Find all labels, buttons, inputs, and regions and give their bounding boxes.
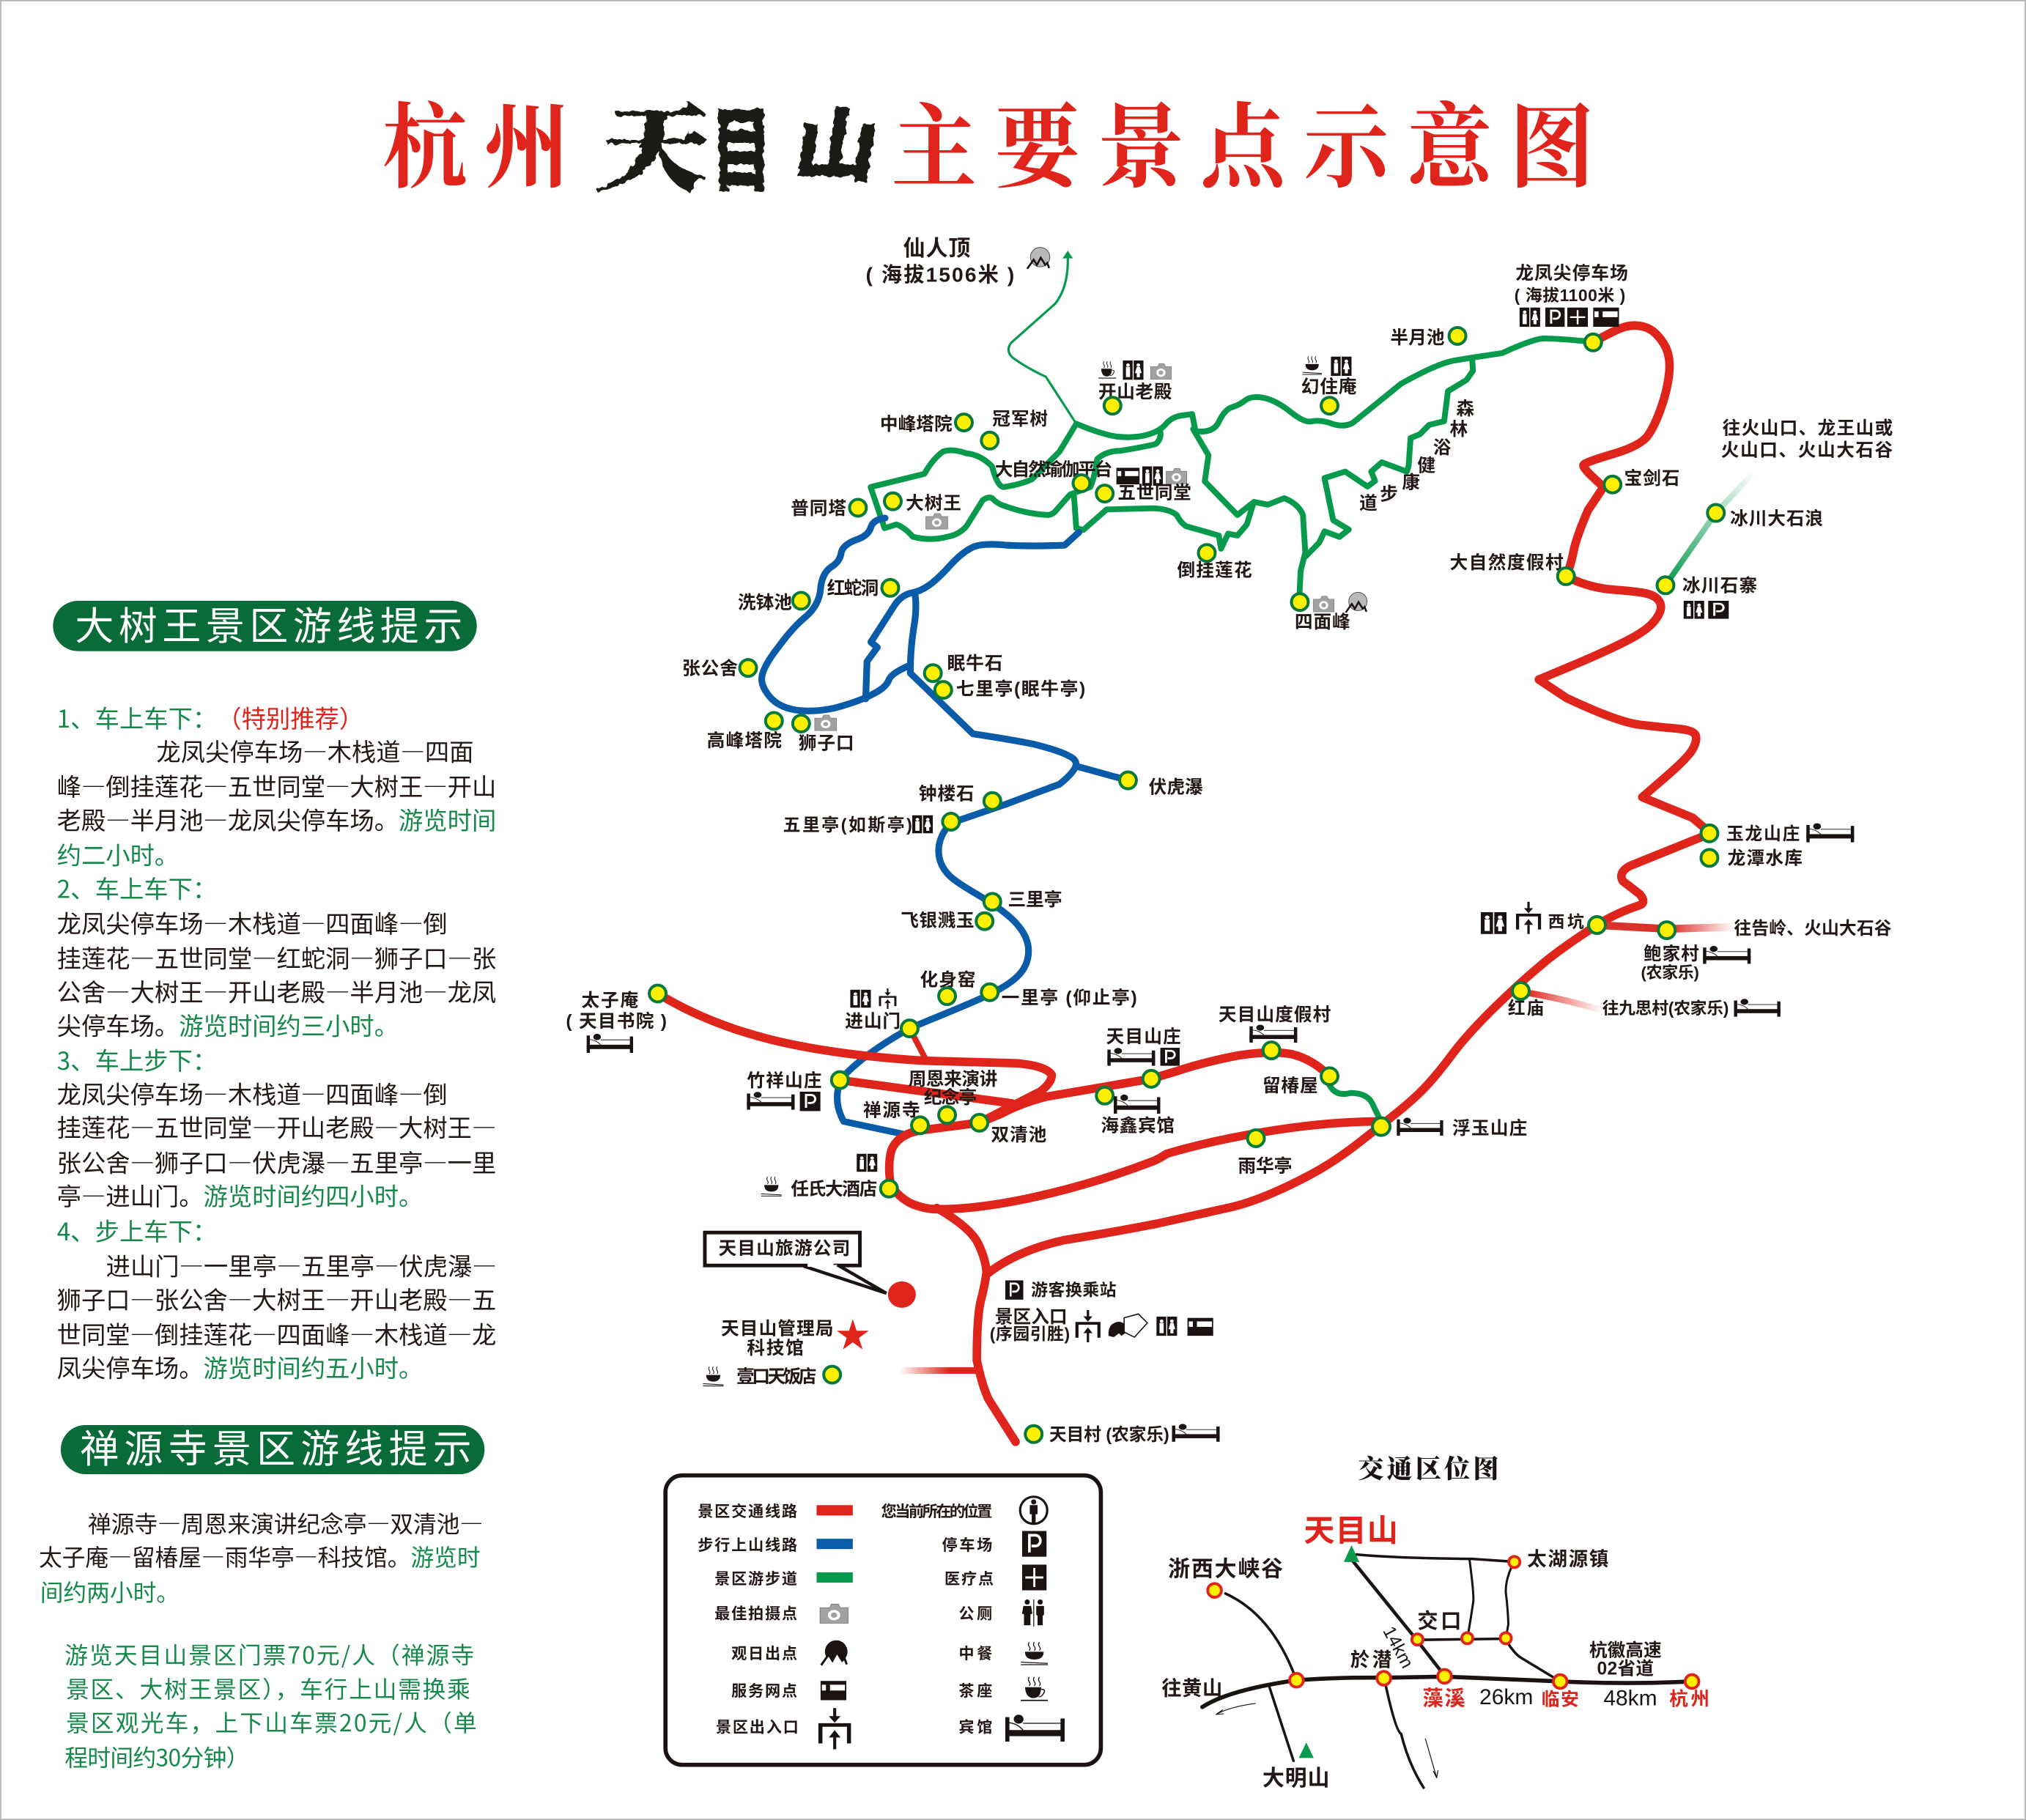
map: scenic south locations bbox=[703, 1005, 1527, 1445]
route tip 1: 车上车下： bbox=[95, 699, 217, 735]
map: north-west locations bbox=[566, 237, 1628, 1053]
place labels: 02省道 bbox=[1597, 1658, 1654, 1679]
location: 三里亭: 三里亭 bbox=[1008, 889, 1062, 910]
location: 壹口天饭店 bbox=[703, 1366, 840, 1387]
route tip 1: 龙凤尖停车场—木栈道—四面 bbox=[156, 733, 473, 769]
legend: right icons: 中餐 bbox=[958, 1645, 992, 1662]
location: 中峰塔院: 中峰塔院 bbox=[880, 414, 953, 434]
location: 往火山口、龙王山或火山大石谷: 往火山口、龙王山或 bbox=[1723, 418, 1893, 438]
location: 往告岭、火山大石谷: 往告岭、火山大石谷 bbox=[1734, 919, 1892, 939]
location: 七里亭: 七里亭(眠牛亭) bbox=[956, 678, 1085, 700]
place labels: 杭徽高速 bbox=[1589, 1640, 1662, 1661]
route tip text: 间约两小时。 bbox=[40, 1575, 180, 1608]
location: 任氏大酒店 bbox=[761, 1154, 898, 1199]
location: 倒挂莲花 bbox=[1177, 544, 1252, 580]
title: 天 bbox=[592, 73, 719, 210]
place labels: 48km bbox=[1603, 1687, 1657, 1711]
route tip 3: 亭—进山门。游览时间约四小时。 bbox=[57, 1177, 423, 1213]
location: 冠军树 bbox=[981, 409, 1048, 449]
location: 半月池: 半月池 bbox=[1390, 328, 1444, 348]
location: 五里亭: 五里亭(如斯亭) bbox=[783, 815, 912, 835]
traffic routes (red) bbox=[658, 325, 1734, 1442]
location: 玉龙山庄 bbox=[1701, 824, 1854, 844]
location: 一里亭: 一里亭 (仰止亭) bbox=[1002, 987, 1137, 1008]
place labels: 藻溪 bbox=[1422, 1687, 1465, 1710]
location: 飞银溅玉: 飞银溅玉 bbox=[901, 910, 975, 931]
location: 海鑫宾馆 bbox=[1096, 1087, 1175, 1136]
location: 海鑫宾馆: 海鑫宾馆 bbox=[1101, 1116, 1175, 1136]
location: 天目山管理局科技馆 bbox=[721, 1319, 869, 1358]
place labels: 26km bbox=[1479, 1685, 1533, 1709]
location: 天目村: 天目村 (农家乐) bbox=[1049, 1425, 1169, 1445]
legend: right icons: 茶座 bbox=[958, 1682, 992, 1700]
location: 玉龙山庄: 玉龙山庄 bbox=[1726, 824, 1800, 844]
location: 红蛇洞 bbox=[827, 577, 898, 599]
legend: right icons bbox=[881, 1497, 1065, 1742]
location: 五世同堂 bbox=[1096, 467, 1191, 503]
location: 往火山口、龙王山或火山大石谷 bbox=[1721, 418, 1893, 460]
location: 禅源寺: 禅源寺 bbox=[863, 1100, 920, 1121]
location: 太子庵 bbox=[566, 985, 667, 1053]
location: 仙人顶 bbox=[865, 237, 1050, 286]
road network bbox=[1202, 1555, 1692, 1788]
location: 眠牛石: 眠牛石 bbox=[947, 653, 1002, 673]
location: 狮子口 bbox=[793, 715, 854, 754]
location: 浮玉山庄: 浮玉山庄 bbox=[1452, 1118, 1527, 1139]
place labels: 浙西大峡谷 bbox=[1168, 1557, 1283, 1581]
legend: route lines bbox=[698, 1502, 853, 1588]
location: 钟楼石: 钟楼石 bbox=[919, 783, 975, 804]
legend: route lines: 步行上山线路 bbox=[698, 1536, 797, 1554]
location: 冰川石寨: 冰川石寨 bbox=[1682, 576, 1757, 596]
route tip 1: 约二小时。 bbox=[57, 836, 179, 872]
location: 天目山度假村 bbox=[1219, 1005, 1331, 1059]
legend: right icons: 公厕 bbox=[958, 1605, 992, 1622]
title: 目 bbox=[711, 76, 772, 210]
route tip 2: 车上车下： bbox=[95, 870, 217, 906]
location: 天目山庄 bbox=[1106, 1026, 1181, 1087]
location: 化身窑 bbox=[920, 969, 975, 1005]
location: 宝剑石: 宝剑石 bbox=[1624, 468, 1679, 489]
location: 景区入口: 景区入口 bbox=[995, 1308, 1068, 1328]
location: 留椿屋: 留椿屋 bbox=[1262, 1076, 1318, 1096]
location: 红庙: 红庙 bbox=[1508, 999, 1544, 1018]
location: 五世同堂: 五世同堂 bbox=[1117, 483, 1191, 503]
location: 龙凤尖停车场: 龙凤尖停车场 bbox=[1515, 263, 1628, 284]
location: 双清池 bbox=[971, 1114, 1046, 1145]
location: 化身窑: 化身窑 bbox=[920, 969, 975, 990]
route tip 3: 张公舍—狮子口—伏虎瀑—五里亭—一里 bbox=[57, 1143, 496, 1179]
map routes bbox=[658, 251, 1755, 1442]
place labels: 交口 bbox=[1417, 1609, 1461, 1632]
label: 森林浴健康步道: 森 bbox=[1456, 399, 1474, 419]
place labels: 於潜 bbox=[1350, 1649, 1392, 1671]
location: 景区入口 bbox=[990, 1308, 1213, 1344]
route tip 3: 龙凤尖停车场—木栈道—四面峰—倒 bbox=[57, 1075, 448, 1111]
ticket information: 景区观光车，上下山车票20元/人（单 bbox=[66, 1705, 477, 1739]
route tip 3 bbox=[57, 1041, 496, 1213]
location: 大树王 bbox=[884, 493, 961, 529]
legend: route lines: 景区交通线路 bbox=[698, 1502, 797, 1520]
location: 高峰塔院 bbox=[707, 712, 783, 751]
route tip 4 bbox=[57, 1212, 497, 1385]
legend: right icons: 停车场 bbox=[942, 1536, 992, 1554]
mountain walking routes (blue) bbox=[762, 518, 1128, 1134]
location: 四面峰: 四面峰 bbox=[1295, 612, 1350, 632]
route tip 1: （特别推荐） bbox=[217, 699, 363, 735]
location: 龙凤尖停车场: ( 海拔1100米 ) bbox=[1515, 286, 1625, 305]
route tip 4: 4、 bbox=[57, 1212, 95, 1248]
route tip 3: 车上步下： bbox=[95, 1041, 217, 1077]
route tip 2: 龙凤尖停车场—木栈道—四面峰—倒 bbox=[57, 904, 448, 940]
route tip 1: 老殿—半月池—龙凤尖停车场。游览时间 bbox=[57, 801, 496, 837]
title: 主要景点示意图 bbox=[892, 98, 1594, 200]
map: eastern locations bbox=[1359, 399, 1893, 1018]
place labels bbox=[1161, 1548, 1709, 1791]
route tip 2: 公舍—大树王—开山老殿—半月池—龙凤 bbox=[57, 973, 496, 1009]
location: 冠军树: 冠军树 bbox=[992, 409, 1048, 429]
route tip 4: 步上车下： bbox=[95, 1212, 217, 1248]
location: 开山老殿: 开山老殿 bbox=[1098, 382, 1172, 402]
route tip text: 太子庵—留椿屋—雨华亭—科技馆。游览时 bbox=[39, 1539, 481, 1573]
ticket information: 程时间约30分钟） bbox=[64, 1739, 249, 1773]
heading: 大树王景区游线提示: 大树王景区游线提示 bbox=[75, 596, 462, 651]
location: 任氏大酒店: 任氏大酒店 bbox=[791, 1179, 877, 1199]
location: 仙人顶: 仙人顶 bbox=[903, 237, 970, 261]
location: 仙人顶: ( 海拔1506米 ) bbox=[865, 262, 1014, 286]
location: 往火山口、龙王山或火山大石谷: 火山口、火山大石谷 bbox=[1721, 440, 1893, 460]
location: 四面峰 bbox=[1291, 592, 1367, 632]
route tip 2: 挂莲花—五世同堂—红蛇洞—狮子口—张 bbox=[57, 939, 496, 975]
label: 森林浴健康步道: 浴 bbox=[1433, 437, 1452, 458]
legend: left icons: 景区出入口 bbox=[716, 1719, 799, 1736]
location: 进山门: 进山门 bbox=[845, 1011, 901, 1032]
location: 开山老殿 bbox=[1098, 360, 1172, 414]
ticket information bbox=[64, 1637, 477, 1773]
label: 森林浴健康步道: 康 bbox=[1402, 473, 1420, 493]
location: 游客换乘站: 游客换乘站 bbox=[1031, 1281, 1117, 1300]
label: 森林浴健康步道: 林 bbox=[1450, 419, 1468, 440]
location: 双清池: 双清池 bbox=[991, 1125, 1046, 1145]
location: 天目山管理局科技馆: 天目山管理局 bbox=[721, 1319, 833, 1339]
legend: left icons: 观日出点 bbox=[731, 1645, 797, 1662]
label: 森林浴健康步道: 健 bbox=[1417, 456, 1435, 476]
location: 普同塔: 普同塔 bbox=[791, 498, 846, 519]
panel: 禅源寺 route tips bbox=[39, 1418, 484, 1773]
route tip 1 bbox=[57, 699, 496, 872]
legend: left icons: 服务网点 bbox=[731, 1682, 797, 1700]
location: 高峰塔院: 高峰塔院 bbox=[707, 730, 782, 751]
location: 大自然瑜伽平台: 大自然瑜伽平台 bbox=[995, 459, 1112, 480]
route tip 2: 2、 bbox=[57, 870, 95, 906]
location: 西坑 bbox=[1481, 902, 1605, 934]
location: 周恩来演讲纪念亭: 周恩来演讲 bbox=[909, 1069, 997, 1090]
location: 宝剑石 bbox=[1604, 468, 1679, 493]
place labels: 大明山 bbox=[1262, 1767, 1330, 1791]
legend: right icons: 宾馆 bbox=[958, 1719, 992, 1736]
location: 冰川大石浪 bbox=[1707, 505, 1823, 529]
heading: 天目山: 天目山 bbox=[1304, 1506, 1398, 1551]
location: 伏虎瀑 bbox=[1120, 772, 1203, 798]
location: 洗钵池: 洗钵池 bbox=[738, 593, 792, 613]
location: 竹祥山庄 bbox=[747, 1070, 849, 1111]
location: 鲍家村 bbox=[1641, 922, 1750, 982]
legend: right icons: 您当前所在的位置 bbox=[881, 1502, 992, 1520]
route tip 4: 狮子口—张公舍—大树王—开山老殿—五 bbox=[57, 1280, 496, 1316]
place labels: 往黄山 bbox=[1161, 1676, 1222, 1699]
location: 西坑: 西坑 bbox=[1548, 912, 1584, 931]
location: 天目山度假村: 天目山度假村 bbox=[1219, 1005, 1331, 1025]
route tip 1: 峰—倒挂莲花—五世同堂—大树王—开山 bbox=[57, 767, 496, 803]
location: 天目山管理局科技馆: 科技馆 bbox=[747, 1338, 804, 1358]
callout: 天目山旅游公司 bbox=[705, 1232, 916, 1308]
walking paths (green) bbox=[870, 251, 1755, 1122]
route tip text bbox=[39, 1506, 483, 1608]
legend panel bbox=[665, 1476, 1101, 1765]
location: 大自然度假村 bbox=[1450, 552, 1575, 585]
location: 鲍家村: (农家乐) bbox=[1641, 963, 1699, 982]
legend: route lines: 景区游步道 bbox=[714, 1570, 797, 1588]
panel: 大树王 route tips bbox=[53, 596, 497, 1385]
route tip 3: 挂莲花—五世同堂—开山老殿—大树王— bbox=[57, 1109, 496, 1144]
route tip 4: 凤尖停车场。游览时间约五小时。 bbox=[57, 1349, 423, 1385]
route tip 2 bbox=[57, 870, 496, 1042]
location: 五里亭 bbox=[783, 813, 959, 835]
location: 三里亭 bbox=[984, 889, 1062, 910]
title: 山 bbox=[787, 83, 887, 198]
location: 留椿屋 bbox=[1262, 1068, 1338, 1096]
location: 竹祥山庄: 竹祥山庄 bbox=[747, 1070, 822, 1091]
location: 半月池 bbox=[1390, 328, 1466, 348]
title bbox=[382, 73, 1594, 210]
location: 倒挂莲花: 倒挂莲花 bbox=[1177, 560, 1252, 580]
location: 景区入口: (序园引胜) bbox=[990, 1325, 1070, 1344]
location: 龙潭水库: 龙潭水库 bbox=[1728, 848, 1803, 869]
label: 森林浴健康步道: 道 bbox=[1359, 493, 1378, 514]
location: 冰川石寨 bbox=[1657, 576, 1757, 619]
location: 浮玉山庄 bbox=[1372, 1118, 1527, 1139]
route tip 4: 进山门—一里亭—五里亭—伏虎瀑— bbox=[106, 1246, 497, 1282]
location: 张公舍: 张公舍 bbox=[682, 657, 738, 678]
location: 雨华亭: 雨华亭 bbox=[1238, 1155, 1292, 1176]
title: 杭州 bbox=[382, 98, 570, 200]
location: 禅源寺 bbox=[863, 1100, 928, 1133]
location: 鲍家村: 鲍家村 bbox=[1644, 944, 1699, 964]
route tip 1: 1、 bbox=[57, 699, 95, 735]
legend: left icons: 最佳拍摄点 bbox=[714, 1605, 797, 1622]
location: 天目山庄: 天目山庄 bbox=[1106, 1026, 1181, 1047]
location: 壹口天饭店: 壹口天饭店 bbox=[736, 1366, 816, 1387]
location: 天目村 bbox=[1025, 1424, 1220, 1445]
transport location map bbox=[1161, 1449, 1709, 1791]
place labels: 14km bbox=[1379, 1623, 1417, 1671]
location: 狮子口: 狮子口 bbox=[799, 733, 854, 754]
location: 大自然度假村: 大自然度假村 bbox=[1450, 552, 1564, 573]
ticket information: 游览天目山景区门票70元/人（禅源寺 bbox=[64, 1637, 474, 1671]
location: 眠牛石 bbox=[925, 653, 1002, 681]
callout: 天目山旅游公司: 天目山旅游公司 bbox=[718, 1238, 850, 1259]
location: 进山门 bbox=[845, 988, 918, 1037]
label: 森林浴健康步道: 步 bbox=[1380, 484, 1398, 504]
location: 太子庵: 太子庵 bbox=[582, 991, 638, 1011]
route tip 3: 3、 bbox=[57, 1041, 95, 1077]
route tip 2: 尖停车场。游览时间约三小时。 bbox=[57, 1006, 399, 1042]
label: 森林浴健康步道 bbox=[1359, 399, 1474, 514]
heading: 禅源寺景区游线提示: 禅源寺景区游线提示 bbox=[80, 1418, 472, 1474]
location: 张公舍 bbox=[682, 657, 756, 678]
place labels: 临安 bbox=[1542, 1690, 1579, 1710]
location: 龙凤尖停车场 bbox=[1515, 263, 1628, 351]
place labels: 杭州 bbox=[1669, 1689, 1709, 1710]
location: 伏虎瀑: 伏虎瀑 bbox=[1149, 777, 1203, 798]
legend: left icons bbox=[714, 1604, 849, 1750]
location: 雨华亭 bbox=[1238, 1130, 1292, 1176]
place labels: 太湖源镇 bbox=[1527, 1548, 1608, 1570]
location: 幻住庵 bbox=[1301, 356, 1357, 414]
location: 幻住庵: 幻住庵 bbox=[1301, 377, 1357, 397]
location: 冰川大石浪: 冰川大石浪 bbox=[1730, 508, 1823, 529]
location: 周恩来演讲纪念亭: 纪念亭 bbox=[924, 1087, 977, 1108]
heading: 交通区位图: 交通区位图 bbox=[1358, 1449, 1499, 1486]
location: 大树王: 大树王 bbox=[906, 493, 961, 514]
location: 往九思村: 往九思村(农家乐) bbox=[1602, 999, 1729, 1018]
legend: right icons: 医疗点 bbox=[944, 1570, 994, 1588]
location: 钟楼石 bbox=[919, 784, 1001, 810]
location: 红蛇洞: 红蛇洞 bbox=[827, 577, 879, 599]
ticket information: 景区、大树王景区），车行上山需换乘 bbox=[66, 1671, 470, 1705]
markers bbox=[1208, 1545, 1698, 1758]
route tip text: 禅源寺—周恩来演讲纪念亭—双清池— bbox=[88, 1506, 483, 1539]
location: 周恩来演讲纪念亭 bbox=[909, 1069, 997, 1123]
location: 红庙 bbox=[1508, 983, 1544, 1018]
location: 太子庵: ( 天目书院 ) bbox=[566, 1011, 667, 1032]
route tip 4: 世同堂—倒挂莲花—四面峰—木栈道—龙 bbox=[57, 1315, 496, 1351]
location: 大自然瑜伽平台 bbox=[995, 459, 1112, 492]
